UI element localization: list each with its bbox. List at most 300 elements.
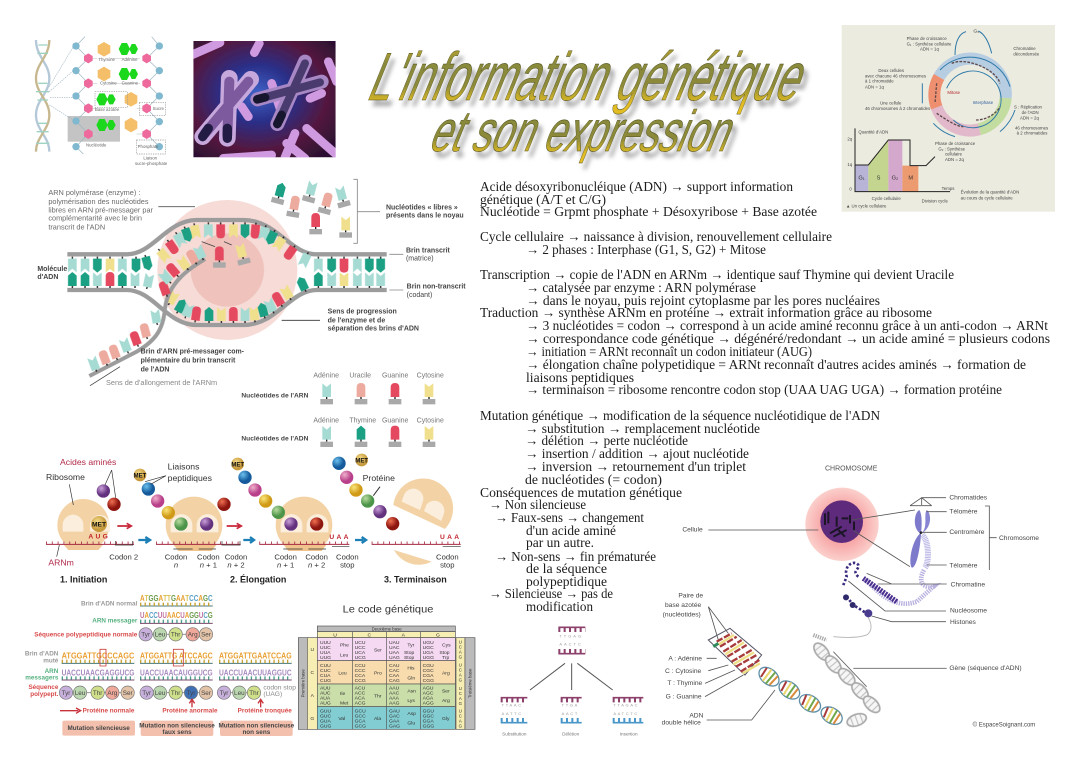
codon cells	[320, 640, 451, 729]
text: cell cycle: → 2 phases : Interphase (G1, S, G2) + Mitose	[526, 242, 766, 258]
chromosome labels: Chromosome	[999, 535, 1039, 542]
codon cells: CCG	[355, 678, 366, 684]
third base column: U	[459, 640, 462, 645]
MET markers	[91, 454, 368, 532]
MET markers: MET	[355, 458, 368, 464]
table headers: C	[368, 632, 372, 638]
table title: Le code génétique	[343, 605, 433, 616]
translation labels: Codon	[436, 552, 459, 561]
cycle labels: Chromatine	[1013, 46, 1036, 51]
transcription labels: libres en ARN pré-messager par	[48, 205, 154, 214]
text: mutation	[480, 408, 880, 488]
codon cells: UGA	[423, 650, 434, 656]
table headers: Première base	[300, 669, 305, 697]
codon cells: Glu	[407, 721, 415, 727]
codon cells: Leu	[338, 671, 347, 677]
chromosome labels: Paire de	[678, 593, 703, 600]
translation labels: UAA	[329, 534, 351, 541]
cycle labels: Une cellule	[880, 101, 902, 106]
codon cells: GCA	[355, 718, 366, 724]
text: mutation consequences: → Non-sens → fin prématurée	[495, 549, 656, 564]
row labels: polypept.	[30, 691, 59, 698]
polypeptide chains: Thr	[171, 632, 180, 639]
codon cells: AGC	[423, 691, 434, 697]
mutation type buttons: Mutation non silencieuse	[139, 722, 215, 729]
table headers: Troisième base	[467, 668, 472, 698]
DNA quantity chart: M	[908, 175, 913, 181]
legend: DNA nucleotides: Thymine	[349, 418, 376, 425]
transcription labels: plémentaire du brin transcrit	[141, 358, 236, 365]
row labels: Séquence polypeptidique normale	[34, 631, 138, 638]
DNA quantity chart: G₁	[858, 175, 865, 181]
polypeptide chains: Tyr	[187, 690, 195, 697]
cycle labels: 46 chromosomes à 2 chromatides	[865, 106, 930, 111]
codon cells: CCC	[355, 668, 366, 674]
transcription labels: Brin d'ARN pré-messager com-	[141, 349, 245, 356]
polypeptide chains: Leu	[234, 690, 245, 697]
cycle labels: Cycle cellulaire	[872, 196, 901, 201]
text: translation: Traduction → synthèse ARNm en protéine → extrait information grâce au ribosome	[480, 305, 932, 320]
amino acids chain	[97, 457, 399, 531]
transcription labels: de l'enzyme et de	[328, 317, 385, 324]
third base column: G	[459, 678, 463, 683]
tree branches	[530, 663, 613, 690]
labels: molecule names: Adénine	[122, 57, 138, 62]
translation labels: Codon	[225, 552, 247, 561]
polypeptide chains	[59, 628, 261, 699]
legend: DNA nucleotides: Nucléotides de l'ADN	[241, 436, 309, 443]
codon cells: ACU	[355, 686, 366, 692]
codon cells: CUA	[320, 673, 331, 679]
text: mutation: de nucléotides (= codon)	[525, 472, 662, 488]
legend: DNA nucleotides	[241, 418, 444, 447]
left straight nucleotides	[68, 254, 154, 290]
cycle labels: à 1 chromatide	[865, 79, 894, 84]
text: mutation: → substitution → remplacement nucléotide	[525, 421, 760, 436]
cycle labels: au cours du cycle cellulaire	[961, 195, 1013, 200]
text: mutation consequences: d'un acide aminé	[526, 523, 616, 538]
codon cells: CGA	[423, 673, 434, 679]
codon cells: UCC	[355, 645, 366, 651]
translation labels: Codon 2	[109, 552, 138, 561]
chromosome labels: Centromère	[949, 529, 985, 536]
translation labels: stop	[440, 561, 455, 570]
chromosome labels: Histones	[950, 619, 977, 626]
polypeptide chains: Arg	[107, 690, 118, 697]
cycle labels: S : Réplication	[1014, 105, 1042, 110]
codon cells: GAU	[389, 708, 400, 714]
coloured DNA double helix	[708, 628, 845, 728]
cycle labels: de l'ADN	[1022, 110, 1039, 115]
mutation type buttons: faux sens	[162, 729, 192, 736]
transcription labels: Molécule	[37, 266, 67, 273]
codon cells: CUG	[320, 678, 331, 684]
cycle labels: 1q	[847, 162, 853, 167]
text: translation: → correspondance code génétique → dégénéré/redondant → un acide aminé = plusieurs codons	[526, 331, 1050, 346]
chromosome labels	[662, 495, 1039, 729]
codon cells: CGU	[423, 663, 434, 669]
codon cells: Ser	[374, 648, 382, 654]
arch bottom nucleotides	[165, 284, 295, 323]
row labels: Brin d'ADN normal	[81, 601, 138, 608]
table headers: U	[333, 632, 337, 638]
mutation type labels	[502, 732, 638, 737]
transcription labels: (matrice)	[406, 255, 434, 262]
codon cells: AUC	[320, 691, 331, 697]
cycle labels: avec chacune 46 chromosomes	[865, 73, 926, 78]
codon cells: AUU	[320, 686, 331, 692]
codon cells: Stop	[404, 650, 414, 656]
cycle labels: Évolution de la quantité d'ADN	[961, 189, 1019, 194]
mutated sequences: TTGA	[562, 703, 579, 708]
codon cells: AGG	[423, 701, 434, 707]
DNA quantity chart: G₂	[892, 175, 898, 181]
codon cells: AAU	[389, 686, 400, 692]
third base column: G	[459, 701, 463, 706]
legend: RNA nucleotides: Cytosine	[417, 373, 444, 380]
codon cells: AUA	[320, 696, 331, 702]
codon cells: GGU	[423, 708, 434, 714]
cycle labels: décondensée	[1013, 51, 1040, 56]
third base column: G	[459, 724, 463, 729]
row labels: muté	[43, 658, 59, 665]
translation labels: Acides aminés	[60, 457, 117, 467]
DNA quantity chart	[855, 128, 950, 192]
text: mutation consequences: → Silencieuse → pas de	[489, 586, 613, 601]
chromosome labels: © EspaceSoignant.com	[973, 722, 1035, 729]
codon cells: Stop	[439, 650, 450, 656]
figure: mutation types tree	[501, 627, 643, 737]
chromosome labels: A : Adénine	[668, 656, 702, 663]
cycle labels: ADN = 2q	[945, 157, 964, 162]
codon cells: Ile	[340, 691, 345, 697]
legend: RNA nucleotides: Nucléotides de l'ARN	[241, 393, 309, 400]
cycle labels: Mitose	[947, 90, 961, 95]
original sequence: AACTC	[559, 642, 583, 647]
callout lines	[705, 498, 997, 720]
codon cells: Stop	[404, 655, 414, 661]
text: mutation consequences: Conséquences de mutation génétique	[480, 485, 682, 500]
cycle labels: ADN = 1q	[920, 47, 939, 52]
codon cells: UCA	[355, 650, 366, 656]
outcome arrows and labels: Protéine tronquée	[238, 708, 292, 715]
codon cells: GGG	[423, 723, 434, 729]
translation labels: Codon	[165, 552, 187, 561]
legend: RNA nucleotides: Adénine	[313, 373, 339, 380]
row labels: Séquence	[28, 684, 59, 691]
table headers: Deuxième base	[372, 626, 402, 631]
codon cells: GUA	[320, 718, 331, 724]
mutated sequences: TTAGAC	[613, 703, 639, 708]
original sequence	[558, 627, 585, 654]
cycle labels: Interphase	[973, 100, 994, 105]
text: mutation: → inversion → retournement d'un triplet	[525, 459, 746, 474]
labels: molecule names: Phosphate	[138, 144, 159, 149]
text: mutation: Mutation génétique → modification de la séquence nucléotidique de l'ADN	[480, 408, 880, 423]
third base column: C	[459, 668, 462, 673]
mutation type buttons: non sens	[242, 729, 271, 736]
labels: molecule names: Nucléotide	[86, 143, 107, 148]
codon cells: UUG	[320, 655, 331, 661]
codon cells: UAU	[389, 640, 400, 646]
mutation type labels: Insertion	[620, 732, 638, 737]
translation labels: Ribosome	[46, 472, 85, 482]
legend: RNA nucleotides	[241, 373, 444, 404]
codon cells: AGA	[423, 696, 434, 702]
transcription labels: séparation des brins d'ADN	[328, 326, 419, 333]
codon cells: CGC	[423, 668, 434, 674]
codon cells: AAA	[389, 696, 400, 702]
codon cells: Asp	[407, 711, 416, 717]
labels: molecule names: Base azotée	[95, 107, 120, 112]
codon cells: Arg	[442, 671, 450, 677]
codon cells: Tyr	[407, 643, 415, 649]
cell with nucleus	[805, 488, 879, 561]
MET markers: MET	[92, 521, 106, 528]
codon cells: CUU	[320, 663, 331, 669]
legend: DNA nucleotides: Adénine	[313, 418, 339, 425]
mutated sequences: UACCUAACUUAGGUC	[219, 667, 292, 677]
codon cells: Arg	[442, 698, 450, 704]
translation labels: n	[174, 561, 178, 570]
outcome arrows and labels	[60, 684, 296, 715]
mutated sequences: AATTC	[502, 711, 523, 716]
text: mutation consequences	[480, 485, 682, 614]
codon cells: GUC	[320, 713, 331, 719]
translation labels: UAA	[440, 534, 461, 541]
third base column: C	[459, 691, 462, 696]
mRNA strands	[46, 543, 461, 544]
codon cells: Gly	[442, 716, 450, 722]
table headers: A	[311, 693, 315, 699]
outcome arrows and labels: (UAG)	[263, 691, 282, 698]
chromosome labels: Télomère	[949, 508, 978, 515]
figure: translation on ribosome	[46, 454, 461, 585]
third base column: A	[459, 719, 462, 724]
cycle labels: Deux cellules	[878, 68, 904, 73]
mutated sequences: ATGGATTGCCCAGC	[62, 651, 134, 661]
mutation type buttons	[62, 721, 295, 736]
codon cells: Lys	[407, 698, 415, 704]
transcription labels: de l'ADN	[141, 366, 169, 373]
codon cells: His	[407, 666, 415, 672]
mutated sequences: ATGGATTGAATCCAG	[219, 651, 292, 661]
cycle labels: cellulaire	[945, 152, 963, 157]
text: mutation consequences: modification	[526, 599, 593, 614]
free nucleotides	[213, 180, 352, 268]
mutated sequences: UACCUAACAUGGUCG	[140, 667, 213, 677]
codon cells: ACG	[355, 701, 366, 707]
translation labels: Codon	[305, 552, 328, 561]
cycle labels	[846, 29, 1048, 208]
text: ADN definition	[480, 179, 817, 219]
chromosome labels: ADN	[689, 712, 704, 719]
codon cells: UAC	[389, 645, 400, 651]
cycle labels: G₂ : Synthèse	[938, 146, 966, 151]
text: ADN definition: génétique (A/T et C/G)	[480, 192, 606, 208]
text: mutation consequences: par un autre.	[526, 535, 594, 550]
translation labels: 3. Terminaison	[384, 575, 447, 585]
table headers: U	[311, 647, 315, 653]
codon cells: Thr	[374, 693, 382, 699]
codon cells: Pro	[374, 671, 382, 677]
table headers: A	[402, 632, 406, 638]
codon cells: Cys	[442, 643, 451, 649]
translation labels: AUG	[88, 533, 110, 540]
codon cells: Ser	[442, 688, 450, 694]
right straight nucleotides	[295, 251, 385, 293]
legend: RNA nucleotides: Guanine	[382, 373, 409, 380]
text: translation	[480, 305, 1050, 398]
labels: molecule names: Cytosine	[100, 81, 117, 86]
codon cells: Val	[338, 716, 345, 722]
third base column: A	[459, 673, 462, 678]
text: translation: liaisons peptidiques	[526, 370, 634, 385]
mutated sequences: AATCTC	[613, 711, 639, 716]
codon cells: UGC	[423, 645, 434, 651]
cycle labels: Division cycle	[922, 199, 948, 204]
text: mutation consequences: → Faux-sens → changement	[495, 510, 644, 525]
chromosome labels: Nucléosome	[950, 608, 987, 615]
figure: from cell to DNA	[662, 465, 1039, 729]
translation labels: stop	[340, 561, 355, 570]
mutation highlights	[100, 649, 183, 666]
codon cells: GGC	[423, 713, 434, 719]
labels: molecule names: sucre-phosphate	[135, 161, 168, 166]
translation labels: peptidiques	[168, 473, 213, 483]
figure: DNA structure with nucleotides	[36, 37, 168, 166]
cycle labels: 2q	[847, 137, 853, 142]
third base column: U	[459, 663, 462, 668]
labels: molecule names	[86, 57, 168, 166]
cycle labels: ADN = 2q	[1020, 115, 1039, 120]
mutation type buttons: Mutation silencieuse	[68, 725, 130, 732]
codon cells: CGG	[423, 678, 434, 684]
polypeptide chains: Leu	[155, 632, 166, 639]
text: cell cycle	[480, 229, 832, 258]
text: translation: → élongation chaîne polypetidique = ARNt reconnaît d'autres acides aminés → formation de	[526, 357, 1026, 372]
RNA polymerase enzyme	[157, 200, 297, 340]
transcription labels: présents dans le noyau	[386, 213, 464, 220]
codon cells: Leu	[340, 652, 349, 658]
translation labels: Liaisons	[168, 461, 200, 471]
text: mutation consequences: → Non silencieuse	[489, 497, 586, 512]
table headers: G	[310, 716, 314, 722]
table headers	[300, 626, 472, 722]
translation labels: 1. Initiation	[60, 575, 107, 585]
third base column: G	[459, 655, 463, 660]
translation labels: n + 1	[277, 561, 294, 570]
text: translation: → initiation = ARNt reconnaît un codon initiateur (AUG)	[526, 344, 812, 360]
mutation type buttons: Mutation non silencieuse	[219, 722, 295, 729]
DNA strands	[67, 220, 387, 325]
codon cells: AGU	[423, 686, 434, 692]
transcription labels: d'ADN	[37, 274, 58, 281]
codon cells: GAC	[389, 713, 400, 719]
cycle labels: à 2 chromatides	[1017, 131, 1047, 136]
text: mutation: → insertion / addition → ajout nucléotide	[525, 446, 749, 461]
codon cells: UAG	[389, 655, 400, 661]
cycle labels: Quantité d'ADN	[858, 129, 888, 134]
codon cells: CAU	[389, 663, 400, 669]
codon cells: UCU	[355, 640, 366, 646]
cycle labels: Temps	[942, 186, 954, 191]
legend: DNA nucleotides: Guanine	[382, 418, 409, 425]
translation labels: 2. Élongation	[230, 574, 286, 585]
third base column	[459, 640, 463, 729]
text: translation: → 3 nucléotides = codon → correspond à un acide aminé reconnu grâce à un anti-codon → ARNt	[526, 318, 1048, 333]
translation labels	[46, 457, 461, 585]
legend: DNA nucleotides: Cytosine	[417, 418, 444, 425]
MET markers: MET	[134, 473, 147, 479]
codon cells: Met	[340, 701, 349, 707]
text: ADN definition: Nucléotide = Grpmt phosphate + Désoxyribose + Base azotée	[480, 204, 817, 219]
mutated sequences	[501, 698, 643, 723]
codon cells: CAC	[389, 668, 400, 674]
title: L'information génétique	[359, 38, 820, 114]
codon cells: AAG	[389, 701, 400, 707]
cycle labels: G₀	[973, 29, 979, 35]
labels: molecule names: Guanine	[122, 81, 139, 86]
chromosome labels: double hélice	[662, 719, 701, 726]
pre-messenger RNA strand	[87, 244, 207, 376]
chromosome labels: Cellule	[682, 527, 703, 534]
text: transcription: → dans le noyau, puis rejoint cytoplasme par les pores nucléaires	[526, 293, 880, 308]
ribosome sites	[63, 489, 444, 532]
text: cell cycle: Cycle cellulaire → naissance à division, renouvellement cellulaire	[480, 229, 832, 244]
MET markers: MET	[231, 462, 244, 468]
translation labels: Codon	[197, 552, 220, 561]
chromosome labels: Chromatine	[951, 581, 985, 588]
text: transcription	[480, 267, 954, 308]
codon cells: GCG	[355, 723, 366, 729]
polypeptide chains: Thr	[249, 690, 259, 697]
mutation type labels: Substitution	[502, 732, 527, 737]
transcription labels: ARN polymérase (enzyme) :	[48, 188, 140, 197]
codon cells: GAG	[389, 723, 400, 729]
codon cells: GCU	[355, 708, 366, 714]
translation labels: ARNm	[48, 558, 74, 568]
codon cells: Asn	[407, 688, 416, 694]
polypeptide chains: Arg	[188, 632, 198, 639]
cycle labels: 0	[849, 187, 852, 192]
codon cells: UUA	[320, 650, 331, 656]
polypeptide chains: Leu	[75, 690, 86, 697]
row labels: Brin d'ADN	[25, 651, 59, 658]
text: mutation consequences: de la séquence	[526, 561, 607, 576]
grey gene helix	[811, 635, 883, 729]
codon cells: UUU	[320, 640, 331, 646]
codon cells: UAA	[389, 650, 400, 656]
codon cells: ACC	[355, 691, 366, 697]
chromosome labels: G : Guanine	[666, 693, 702, 700]
polypeptide chains: Tyr	[142, 690, 151, 697]
text: ADN definition: Acide désoxyribonucléique (ADN) → support information	[480, 179, 793, 195]
text: transcription: Transcription → copie de l'ADN en ARNm → identique sauf Thymine qui devient Uracile	[480, 267, 954, 282]
translation labels: Codon	[274, 552, 297, 561]
normal sequences: UACCUUAACUAGGUCG	[140, 610, 213, 620]
title	[359, 38, 820, 163]
codon cells: CCU	[355, 663, 366, 669]
chromatin coil	[833, 563, 933, 637]
text: translation: → terminaison = ribosome rencontre codon stop (UAA UAG UGA) → formation protéine	[526, 382, 1002, 398]
codon cells: Gln	[407, 675, 415, 681]
cell cycle ring	[934, 59, 1006, 131]
text: mutation: → délétion → perte nucléotide	[525, 433, 688, 448]
figure: genetic code table	[298, 605, 475, 729]
polypeptide chains: Tyr	[141, 632, 150, 639]
figure: mutation sequences	[25, 593, 296, 736]
